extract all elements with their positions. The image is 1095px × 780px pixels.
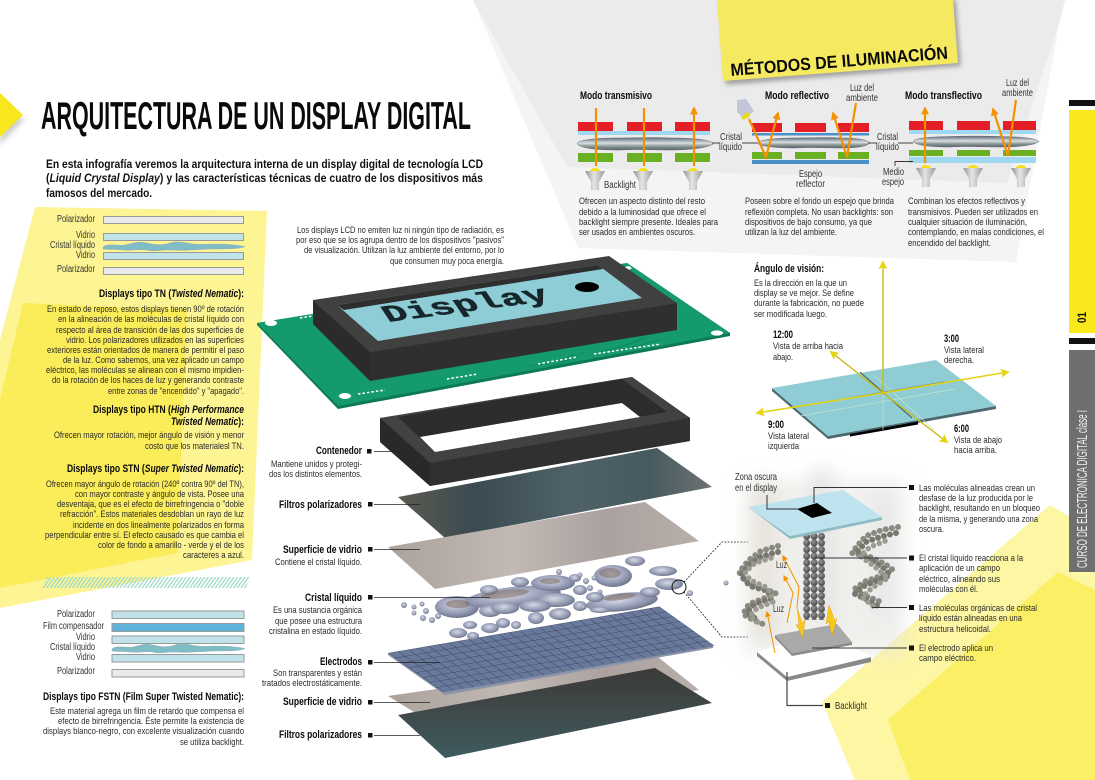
callout: electrodo: campo eléctrico. <box>919 653 976 664</box>
layer diagram: FSTN display: Vidrio <box>76 632 95 643</box>
layer diagram: FSTN display: Cristal líquido <box>50 642 95 653</box>
illustration: electrodes grid <box>388 607 715 695</box>
heading tab: métodos de iluminación <box>717 0 961 85</box>
callout: zona oscura <box>735 472 798 509</box>
callout: electrodo: El electrodo aplica un <box>919 643 993 654</box>
text block: displays HTN: Displays tipo HTN (High Performance <box>93 404 244 416</box>
text block: displays FSTN <box>43 691 244 748</box>
diagram: modo reflectivo: Luz del <box>850 83 874 94</box>
diagram: modo transflectivo <box>882 78 1039 188</box>
text: modo transflectivo description: Combinan los efectos reflectivos y <box>908 196 1025 207</box>
label: 12:00 <box>773 329 844 363</box>
labels: exploded view: Superficie de vidrio <box>283 544 362 556</box>
callout: backlight <box>787 672 867 712</box>
text block: displays FSTN: efecto de birrefringencia. Éste permite la existencia de <box>58 716 244 727</box>
layer diagram: TN display <box>50 214 245 275</box>
illustration: helical molecules left <box>739 546 778 624</box>
text block: displays STN: con mayor contraste y ángulo de vista. Posee una <box>75 489 245 500</box>
text: ángulo de visión: durante la fabricación, no puede <box>754 298 864 309</box>
callout: moléculas alineadas: oscura. <box>919 524 944 535</box>
illustration: contenedor frame <box>380 377 690 486</box>
text block: displays TN: vidrio. Los polarizadores utilizados en las superficies <box>66 335 244 346</box>
callout: moléculas alineadas: Las moléculas alineadas crean un <box>919 483 1035 494</box>
background: bottom right yellow shapes <box>822 505 1095 780</box>
label: 12:00: 12:00 <box>773 329 793 341</box>
callout: moléculas orgánicas: líquido están alineadas en una <box>919 613 1023 624</box>
text: ángulo de visión: ser modificada luego. <box>754 309 827 320</box>
illustration: electrode plate <box>775 624 852 656</box>
label: 12:00: abajo. <box>773 352 793 363</box>
text: ángulo de visión: display se ve mejor. Se define <box>754 288 854 299</box>
heading tab: métodos de iluminación: MÉTODOS DE ILUMINACIÓN <box>730 42 949 80</box>
text block: displays STN: caracteres a azul. <box>183 550 244 561</box>
callout: cristal líquido reacciona: El cristal líquido reacciona a la <box>919 553 1024 564</box>
diagram: modo transflectivo: Modo transflectivo <box>905 90 982 102</box>
magnifier circle <box>672 580 686 594</box>
diagram: modo transflectivo: Medio <box>883 167 904 178</box>
text block: displays STN: incidente en dos linealmente polarizados en forma <box>73 520 245 531</box>
callout: moléculas orgánicas <box>872 603 1037 635</box>
labels: exploded view: cristalina en estado líquido. <box>269 626 362 637</box>
label: 9:00: 9:00 <box>768 419 784 431</box>
diagram: modo transmisivo: Backlight <box>604 180 636 191</box>
text: ángulo de visión <box>754 262 864 320</box>
layer diagram: FSTN display: Polarizador <box>57 666 95 677</box>
callout: cristal liquido 2: líquido <box>876 142 899 153</box>
diagram: modo reflectivo: reflector <box>796 179 826 190</box>
diagram: modo reflectivo: Modo reflectivo <box>765 90 829 102</box>
labels: exploded view: dos los distintos elementos. <box>269 469 362 480</box>
illustration: polarizing filter top <box>398 448 712 538</box>
text block: LCD pasivos: que consumen muy poca energía. <box>390 256 504 267</box>
text block: displays FSTN: Displays tipo FSTN (Film Super Twisted Nematic): <box>43 691 244 703</box>
decorative arrow: yellow tab <box>0 93 24 145</box>
background: left yellow shapes <box>0 207 267 608</box>
labels: exploded view: que posee una estructura <box>275 616 363 627</box>
callout: cristal liquido 1: Cristal <box>720 132 742 143</box>
text block: displays STN: desventaja, que es el efecto de birrefringencia o "doble <box>57 499 244 510</box>
text block: displays TN: exteriores están orientados de manera de permitir el paso <box>47 345 244 356</box>
label: 9:00: izquierda <box>768 441 800 452</box>
illustration: glass surface bottom <box>388 657 699 728</box>
sidebar: course label: CURSO DE ELECTRONICA DIGITAL clase I <box>1074 410 1091 568</box>
layer diagram: FSTN display: Polarizador <box>57 609 95 620</box>
labels: exploded view: Contenedor <box>316 445 363 457</box>
text block: displays TN <box>46 288 244 397</box>
text: ángulo de visión: Ángulo de visión: <box>754 262 824 275</box>
text: modo transflectivo description: encendido del backlight. <box>908 238 991 249</box>
labels: exploded view: Cristal líquido <box>305 592 362 604</box>
text: modo transmisivo description: ser usados en ambientes oscuros. <box>579 227 695 238</box>
labels: exploded view: Mantiene unidos y protegi- <box>271 459 362 470</box>
text block: displays TN: En estado de reposo, estos displays tienen 90º de rotación <box>47 304 244 315</box>
text: modo transmisivo description <box>579 196 719 238</box>
callout: zona oscura: Zona oscura <box>735 472 777 483</box>
diagram: modo reflectivo: ambiente <box>846 93 878 104</box>
illustration: assembled LCD module: Display <box>375 281 556 329</box>
text: modo transflectivo description: cualquier situación de iluminación, <box>908 217 1027 228</box>
text block: displays HTN: Ofrecen mayor rotación, mejor ángulo de visión y menor <box>54 430 245 441</box>
layer diagram: FSTN display: Vidrio <box>76 652 95 663</box>
illustration: glass surface top <box>388 502 699 589</box>
text: modo transflectivo description: contemplando, en malas condiciones, el <box>908 227 1044 238</box>
text block: displays STN: Displays tipo STN (Super Twisted Nematic): <box>67 463 244 475</box>
labels: exploded view: Es una sustancia orgánica <box>273 605 363 616</box>
labels: luz: Luz <box>773 604 784 615</box>
label: 12:00: Vista de arriba hacia <box>773 341 844 352</box>
text block: displays STN: color de fondo a amarillo - verde y el de los <box>98 540 244 551</box>
text block: displays HTN: Twisted Nematic): <box>171 416 244 428</box>
text: modo reflectivo description <box>745 196 895 238</box>
labels: exploded view: Electrodos <box>320 656 362 668</box>
chart: viewing angle axes <box>757 262 1008 442</box>
label: 6:00 <box>954 423 1002 456</box>
diagram: modo reflectivo: Espejo <box>799 169 822 180</box>
layer diagram: TN display: Polarizador <box>57 214 95 225</box>
illustration: backlight plate <box>757 632 871 681</box>
text block: displays HTN: costo que los materialesl TN. <box>145 441 244 452</box>
callout: cristal liquido 2 <box>868 132 913 153</box>
intro text <box>46 157 483 200</box>
layer diagram: TN display: Vidrio <box>76 230 95 241</box>
callout: zona oscura: en el display <box>735 483 777 494</box>
text block: LCD pasivos: Los displays LCD no emiten luz ni ningún tipo de radiación, es <box>297 225 504 236</box>
illustration: polarizing filter bottom <box>398 668 712 758</box>
text block: displays TN: de la luz. Como sabemos, una vez aplicado un campo <box>63 355 244 366</box>
text: modo transflectivo description <box>908 196 1044 249</box>
labels: exploded view: Superficie de vidrio <box>283 696 362 708</box>
text block: displays STN <box>45 463 245 561</box>
label: 6:00: Vista de abajo <box>954 435 1002 446</box>
callout: cristal liquido 1 <box>712 132 758 153</box>
callout: cristal líquido reacciona: moléculas con él. <box>919 584 978 595</box>
text: ángulo de visión: Es la dirección en la que un <box>754 278 847 289</box>
layer diagram: FSTN display: Film compensador <box>43 621 104 632</box>
text block: displays TN: en la alineación de las moléculas de cristal líquido con <box>58 314 244 325</box>
decorative hatch band <box>41 577 250 588</box>
text: modo transmisivo description: backlight siempre presente. Ideales para <box>579 217 719 228</box>
labels: exploded view <box>262 445 490 741</box>
label: 9:00 <box>768 419 809 452</box>
illustration: top glass with dark zone <box>748 490 882 539</box>
illustration: liquid crystal blobs <box>401 556 728 640</box>
sidebar: course label <box>1069 350 1095 572</box>
diagram: modo transmisivo: Modo transmisivo <box>580 90 652 102</box>
label: 3:00 <box>944 333 984 366</box>
labels: exploded view: Filtros polarizadores <box>279 499 362 511</box>
text block: LCD pasivos <box>296 225 504 267</box>
text: modo reflectivo description: dispositivos de bajo consumo, ya que <box>745 217 872 228</box>
dashed zoom lines <box>684 542 748 637</box>
arrows: light rays <box>767 556 799 653</box>
label: 3:00: Vista lateral <box>944 345 984 356</box>
text block: displays FSTN: displays blanco-negro, con excelente visualización cuando <box>43 726 244 737</box>
illustration: liquid crystal interior tones <box>446 568 636 608</box>
text block: displays HTN <box>54 404 245 452</box>
intro text: (Liquid Crystal Display) y las características técnicas de cuatro de los dispositivos más <box>46 171 483 185</box>
text block: displays TN: Displays tipo TN (Twisted Nematic): <box>99 288 244 300</box>
callout: moléculas orgánicas: Las moléculas orgánicas de cristal <box>919 603 1037 614</box>
labels: exploded view: Filtros polarizadores <box>279 729 362 741</box>
callout: moléculas orgánicas: estructura helicoidal. <box>919 624 991 635</box>
icon: lightning bolts <box>796 605 837 638</box>
text block: displays TN: entre zonas de "encendido" y "apagado". <box>108 386 244 397</box>
callout: cristal liquido 1: líquido <box>719 142 742 153</box>
label: 6:00: 6:00 <box>954 423 969 435</box>
callout: cristal liquido 2: Cristal <box>877 132 898 143</box>
background: soft grey haze behind molecules <box>745 470 905 655</box>
label: 9:00: Vista lateral <box>768 431 809 442</box>
callout: moléculas alineadas: de la misma, y generando una zona <box>919 514 1039 525</box>
text: modo transmisivo description: Ofrecen un aspecto distinto del resto <box>579 196 705 207</box>
text: modo reflectivo description: Poseen sobre el fondo un espejo que brinda <box>745 196 895 207</box>
sidebar: number tab <box>1069 100 1095 344</box>
text block: LCD pasivos: por eso que se los agrupa dentro de los dispositivos "pasivos" <box>296 235 504 246</box>
text block: displays FSTN: se utiliza backlight. <box>180 737 244 748</box>
diagram: modo transmisivo <box>577 90 714 191</box>
illustration: aligned molecule column <box>803 533 825 620</box>
labels: exploded view: tratados electrostáticamente. <box>262 678 362 689</box>
diagram: modo reflectivo <box>737 83 878 190</box>
labels: exploded view: Contiene el cristal líquido. <box>275 557 362 568</box>
layer diagram: TN display: Polarizador <box>57 264 95 275</box>
labels: luz: Luz <box>776 560 787 571</box>
label: 3:00: derecha. <box>944 355 974 366</box>
label: 3:00: 3:00 <box>944 333 959 345</box>
callout: moléculas alineadas: desfase de la luz producida por le <box>919 493 1033 504</box>
diagram: modo transflectivo: espejo <box>882 177 904 188</box>
callout: moléculas alineadas: backlight, resultando en un bloqueo <box>919 503 1040 514</box>
text: modo reflectivo description: reflexión completa. No usan backlights: son <box>745 207 893 218</box>
callout: cristal líquido reacciona: eléctrico, alineando sus <box>919 574 1000 585</box>
callout: electrodo <box>812 643 993 664</box>
layer diagram: FSTN display <box>43 609 245 677</box>
labels: luz <box>773 560 787 615</box>
illustration: assembled LCD module <box>257 256 730 409</box>
text block: LCD pasivos: de visualización. Utilizan la luz ambiente del entorno, por lo <box>304 245 504 256</box>
text block: displays STN: perpendicular entre sí. El efecto causado es que cambia el <box>45 530 244 541</box>
labels: exploded view: Son transparentes y están <box>273 668 362 679</box>
label: 6:00: hacia arriba. <box>954 445 997 456</box>
illustration: helical molecules right <box>852 527 898 607</box>
text: modo reflectivo description: utilizan la luz del ambiente. <box>745 227 837 238</box>
title: ARQUITECTURA DE UN DISPLAY DIGITAL <box>41 95 471 138</box>
text: modo transflectivo description: transmisivos. Pueden ser utilizados en <box>908 207 1038 218</box>
callout: cristal líquido reacciona <box>815 553 1024 595</box>
text block: displays TN: do la rotación de los haces de luz y generando contraste <box>52 375 244 386</box>
diagram: modo transflectivo: ambiente <box>1002 88 1033 99</box>
sidebar: number tab: 01 <box>1075 312 1089 323</box>
diagram: modo transflectivo: Luz del <box>1006 78 1029 89</box>
intro text: En esta infografía veremos la arquitectura interna de un display digital de tecnología LCD <box>46 157 483 171</box>
text block: displays STN: Ofrecen mayor ángulo de rotación (240º contra 90º del TN), <box>46 479 244 490</box>
text block: displays TN: respecto al área de transición de las dos superficies de <box>56 325 244 336</box>
text: modo transmisivo description: debido a la luminosidad que ofrece el <box>579 207 706 218</box>
layer diagram: TN display: Cristal líquido <box>50 240 95 251</box>
callout: cristal líquido reacciona: aplicación de un campo <box>919 563 1000 574</box>
callout: moléculas alineadas <box>814 483 1040 535</box>
callout: backlight: Backlight <box>835 701 867 712</box>
intro text: famosos del mercado. <box>46 186 152 200</box>
text block: displays STN: refracción". Estos materiales desdoblan un rayo de luz <box>60 509 244 520</box>
background: grey top right panel <box>473 0 1065 262</box>
layer diagram: TN display: Vidrio <box>76 250 95 261</box>
text block: displays FSTN: Este material agrega un film de retardo que compensa el <box>50 706 244 717</box>
text block: displays TN: eléctrico, las moléculas se alinean con el mismo impidien- <box>46 365 244 376</box>
